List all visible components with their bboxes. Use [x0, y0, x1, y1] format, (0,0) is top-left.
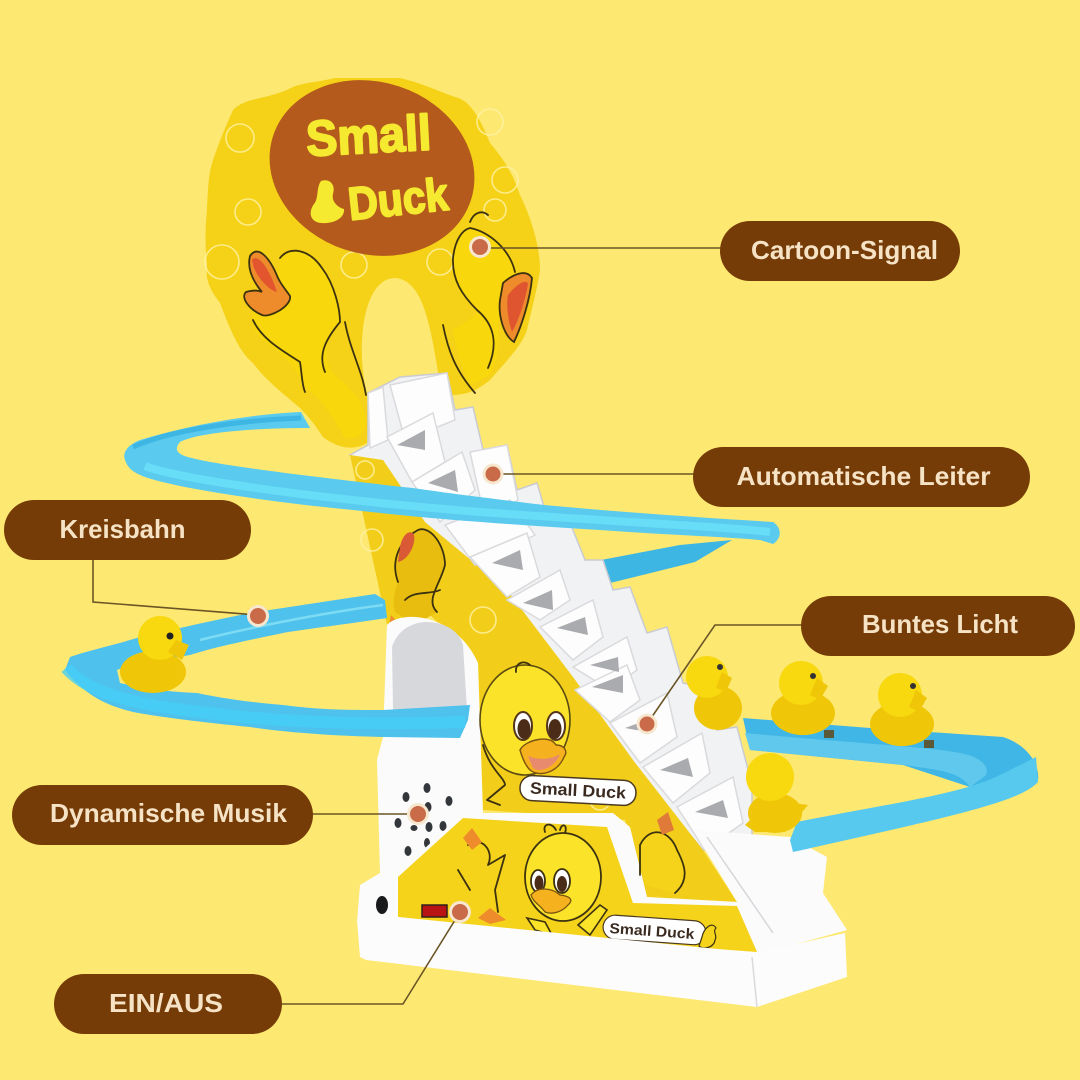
automatic stairs — [368, 373, 743, 850]
toy duck right one — [771, 661, 835, 738]
label: Dynamische Musik — [12, 785, 313, 845]
tunnel arch — [392, 622, 467, 710]
toy duck on left track — [120, 616, 189, 693]
central cartoon duck — [480, 662, 637, 806]
sign brown oval — [247, 54, 497, 282]
label: Kreisbahn: Kreisbahn — [60, 514, 186, 544]
label: Cartoon-Signal: Cartoon-Signal — [751, 235, 938, 265]
small right duck — [640, 812, 685, 893]
stair vents — [397, 430, 425, 450]
connector: Kreisbahn — [93, 560, 268, 626]
tower side duck — [389, 529, 445, 630]
label: Automatische Leiter — [693, 447, 1030, 507]
connector: EIN/AUS — [282, 902, 470, 1004]
lower duck label: Small Duck — [609, 921, 696, 943]
central duck label — [519, 775, 637, 806]
sign ghost duck patterns — [205, 109, 518, 279]
label: Cartoon-Signal — [720, 221, 960, 281]
label: EIN/AUS — [54, 974, 282, 1034]
label: Buntes Licht — [801, 596, 1075, 656]
lower cartoon duck — [525, 825, 607, 935]
track: far back segment behind stairs — [585, 540, 732, 583]
power switch — [422, 905, 447, 917]
connector: Automatische Leiter — [484, 465, 694, 483]
sign arch opening — [362, 278, 440, 392]
lower white block and yellow base panel — [357, 812, 847, 1007]
sign board with Small Duck logo: Duck — [346, 168, 451, 230]
right cartoon duck — [443, 212, 532, 393]
sign board with Small Duck logo — [205, 54, 540, 448]
toy duck on stairs — [745, 753, 808, 833]
label: Dynamische Musik: Dynamische Musik — [50, 798, 288, 828]
label: EIN/AUS: EIN/AUS — [109, 988, 223, 1018]
label: Kreisbahn — [4, 500, 251, 560]
sign text: Small — [305, 105, 432, 167]
tower panel ghost pattern — [356, 461, 610, 810]
label: Buntes Licht: Buntes Licht — [862, 609, 1018, 639]
central duck label: Small Duck — [530, 779, 627, 803]
track: upper ribbon in front — [124, 412, 780, 544]
base plate — [357, 917, 847, 1007]
track: right lower ribbon — [743, 718, 1038, 852]
toy duck right two — [870, 673, 934, 748]
track: left lower ribbon — [65, 594, 470, 738]
left cartoon duck — [244, 251, 366, 438]
black button — [376, 896, 388, 914]
stairs side risers — [350, 373, 752, 850]
toy duck behind stairs — [686, 656, 742, 730]
connector: Buntes Licht — [638, 625, 802, 733]
small side duck — [458, 828, 506, 924]
lower duck label — [602, 914, 716, 948]
connector: Cartoon-Signal — [470, 238, 722, 256]
sign duck glyph — [311, 180, 344, 223]
white tunnel and speaker body — [360, 617, 483, 885]
connector: Dynamische Musik — [312, 804, 428, 824]
speaker holes — [394, 783, 452, 856]
yellow tower panel — [350, 455, 737, 902]
label: Automatische Leiter: Automatische Leiter — [736, 461, 990, 491]
